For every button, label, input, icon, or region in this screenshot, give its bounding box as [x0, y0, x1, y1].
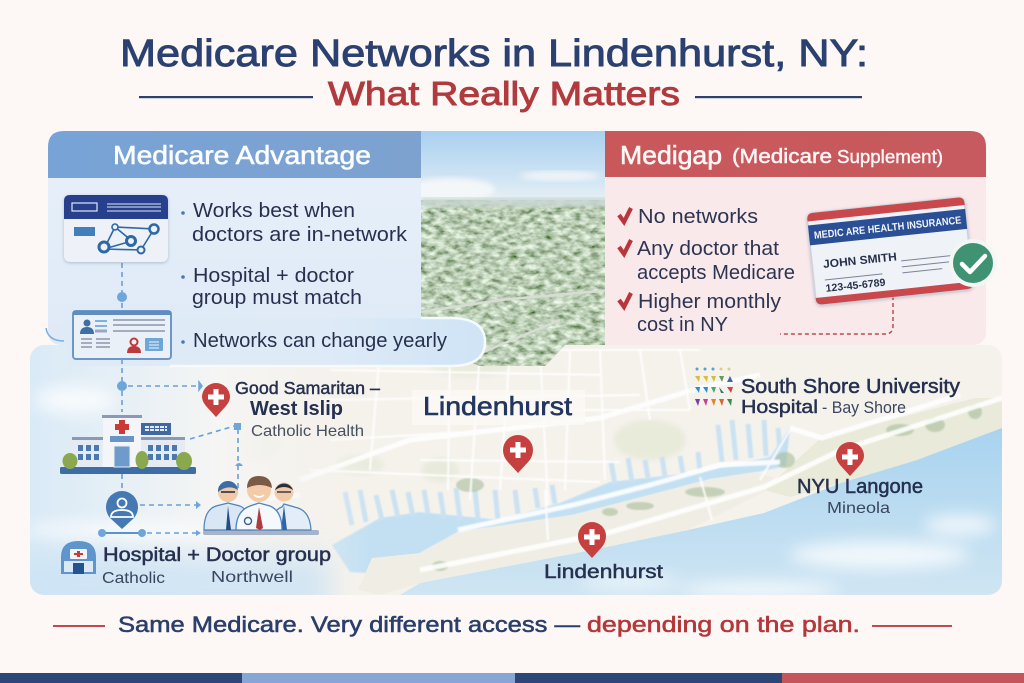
- icon: small hospital: [61, 541, 96, 574]
- panel header: Medicare Advantage: Medicare Advantage: [113, 140, 371, 170]
- bullet pill: networks can change yearly: [46, 318, 485, 366]
- footer tagline: depending on the plan.: [587, 612, 860, 637]
- icon: Medicare health insurance card: MEDIC ARE HEALTH INSURANCE: [813, 214, 962, 242]
- bullet list: Medicare Advantage: Works best when: [193, 200, 355, 222]
- label: NYU Langone Mineola: [797, 476, 923, 517]
- dashed connector: Medigap card: [780, 296, 893, 334]
- footer tagline: [53, 612, 952, 637]
- text: Hospital + Doctor group: Northwell: [211, 569, 293, 586]
- map land: [340, 345, 1002, 595]
- text: Hospital + Doctor group: Catholic: [102, 570, 165, 587]
- label: South Shore University Hospital: - Bay Shore: [822, 399, 906, 417]
- text: Hospital + Doctor group: Hospital + Doctor group: [103, 545, 331, 566]
- pin: Lindenhurst north: [503, 435, 533, 473]
- map roads: [292, 349, 1002, 572]
- pin: Lindenhurst south: [578, 522, 606, 558]
- bullet list: Medicare Advantage: [181, 200, 408, 309]
- footer tagline: Same Medicare. Very different access —: [118, 612, 580, 637]
- map right-hand green shore: [764, 398, 1002, 497]
- label: South Shore University Hospital: Hospital: [741, 397, 818, 417]
- map sea: [400, 428, 1002, 595]
- label: South Shore University Hospital: South Shore University: [741, 376, 960, 398]
- label: Good Samaritan West Islip: Good Samaritan –: [235, 378, 380, 398]
- bullet list: Medicare Advantage: Hospital + doctor: [193, 265, 354, 287]
- checklist: Medigap: Higher monthly: [638, 291, 781, 313]
- panel: Medicare Advantage: [48, 131, 421, 345]
- subtitle with rules: What Really Matters: [328, 75, 680, 112]
- icon: patient location pin: [98, 491, 146, 537]
- checklist: Medigap: cost in NY: [637, 314, 728, 336]
- map left wash: [30, 345, 370, 595]
- aerial photo of Lindenhurst: [421, 131, 605, 366]
- icon: Medicare health insurance card: 123-45-6789: [825, 277, 886, 295]
- icon: doctors group: [203, 476, 319, 535]
- connector lines: [122, 263, 238, 533]
- label: Good Samaritan West Islip: West Islip: [250, 398, 343, 420]
- bullet list: Medicare Advantage: group must match: [192, 287, 362, 309]
- label: South Shore University Hospital: [741, 376, 960, 417]
- panel header: Medigap: Supplement): [837, 147, 943, 167]
- icon: member ID card: [73, 311, 171, 359]
- bullet list: Medicare Advantage: doctors are in-network: [192, 224, 408, 246]
- pin: NYU Langone: [836, 442, 864, 476]
- checklist: Medigap: accepts Medicare: [637, 262, 795, 284]
- label: Good Samaritan West Islip: Catholic Health: [251, 423, 364, 440]
- pin: Good Samaritan: [202, 383, 230, 417]
- panel header: Medigap: Medigap: [620, 140, 722, 170]
- label: NYU Langone Mineola: Mineola: [827, 500, 890, 517]
- label: Lindenhurst: Lindenhurst: [423, 391, 573, 421]
- panel header: Medigap: (Medicare: [732, 146, 832, 168]
- map barrier island: [365, 472, 766, 578]
- title: Medicare Networks in Lindenhurst, NY:: [120, 33, 868, 75]
- icon: South Shore logo grid: [695, 368, 733, 406]
- icon: Medicare health insurance card: JOHN SMITH: [823, 251, 897, 271]
- label: Lindenhurst: [412, 390, 585, 425]
- map bay: [332, 428, 790, 575]
- label: Good Samaritan West Islip: [235, 378, 380, 440]
- connector nodes: [117, 292, 243, 536]
- panel header: Medigap: [605, 131, 986, 177]
- text: Hospital + Doctor group: [102, 545, 331, 587]
- label: Lindenhurst south: Lindenhurst: [544, 562, 664, 583]
- panel header: Medicare Advantage: [48, 131, 421, 178]
- bottom colour strip: [0, 673, 1024, 683]
- panel: Medigap: [605, 131, 997, 345]
- checklist: Medigap: [619, 206, 795, 336]
- icon: network insurance card: [64, 195, 168, 262]
- checklist: Medigap: No networks: [638, 206, 758, 228]
- icon: hospital building: [60, 415, 196, 474]
- map canals: [345, 420, 780, 525]
- checklist: Medigap: Any doctor that: [637, 238, 779, 260]
- icon: Medicare health insurance card: [807, 197, 973, 305]
- label: NYU Langone Mineola: NYU Langone: [797, 476, 923, 498]
- bullet pill: networks can change yearly: Networks can change yearly: [193, 330, 447, 352]
- icon: green check badge: [949, 239, 997, 287]
- panel: map of Long Island south shore: [10, 345, 1002, 615]
